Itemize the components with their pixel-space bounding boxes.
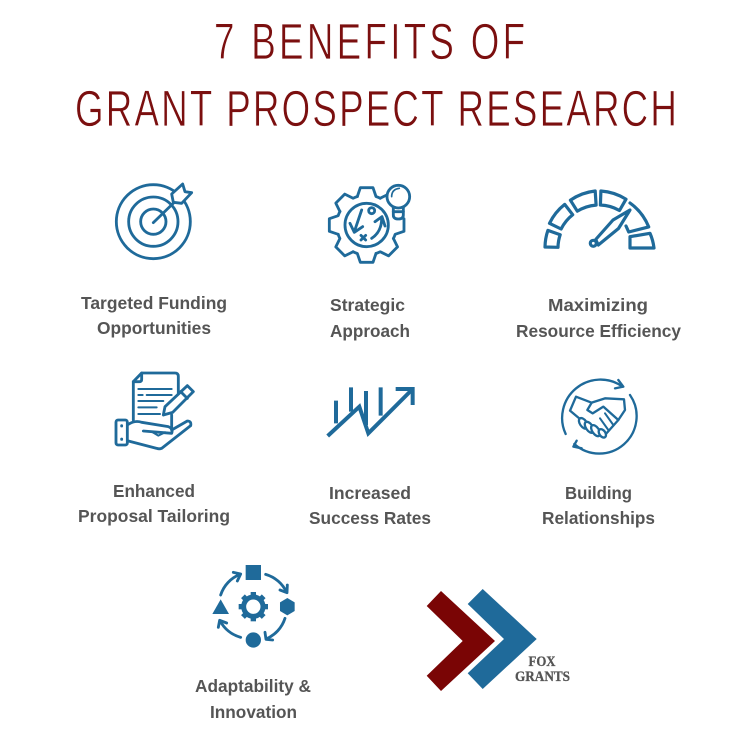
label: targeted funding opportunities: Targeted Funding xyxy=(81,293,227,313)
label: enhanced proposal tailoring: Enhanced xyxy=(113,481,195,501)
label: enhanced proposal tailoring: Proposal Tailoring xyxy=(78,506,230,526)
label: adaptability and innovation: Innovation xyxy=(210,702,297,722)
icon: speedometer gauge xyxy=(545,191,654,248)
icon: adaptability cycle with shapes and gear xyxy=(212,565,295,648)
label: increased success rates xyxy=(309,483,431,528)
label: maximizing resource efficiency: Maximizing xyxy=(548,295,648,315)
title: 7 BENEFITS OF xyxy=(214,14,525,70)
title: GRANT PROSPECT RESEARCH xyxy=(75,81,677,137)
label: building relationships: Relationships xyxy=(542,508,655,528)
label: building relationships: Building xyxy=(565,483,632,503)
label: strategic approach xyxy=(330,295,410,341)
icon: target with arrow xyxy=(116,184,192,259)
label: adaptability and innovation xyxy=(195,676,311,722)
icon: rising trend chart xyxy=(328,387,413,436)
icon: handshake in cycle arrows xyxy=(562,380,637,454)
title xyxy=(75,14,677,137)
label: increased success rates: Success Rates xyxy=(309,508,431,528)
logo: fox grants: FOX xyxy=(528,654,556,670)
label: increased success rates: Increased xyxy=(329,483,411,503)
label: enhanced proposal tailoring xyxy=(78,481,230,526)
icon: gear with lightbulb xyxy=(329,185,410,262)
label: targeted funding opportunities: Opportunities xyxy=(97,318,211,338)
icon: document on hand with pencil xyxy=(116,373,193,449)
logo: fox grants xyxy=(427,589,570,691)
logo: fox grants: GRANTS xyxy=(515,669,570,685)
label: building relationships xyxy=(542,483,655,528)
label: strategic approach: Approach xyxy=(330,321,410,341)
label: adaptability and innovation: Adaptability & xyxy=(195,676,311,696)
label: maximizing resource efficiency xyxy=(516,295,681,341)
label: targeted funding opportunities xyxy=(81,293,227,338)
label: strategic approach: Strategic xyxy=(330,295,405,315)
label: maximizing resource efficiency: Resource Efficiency xyxy=(516,321,681,341)
